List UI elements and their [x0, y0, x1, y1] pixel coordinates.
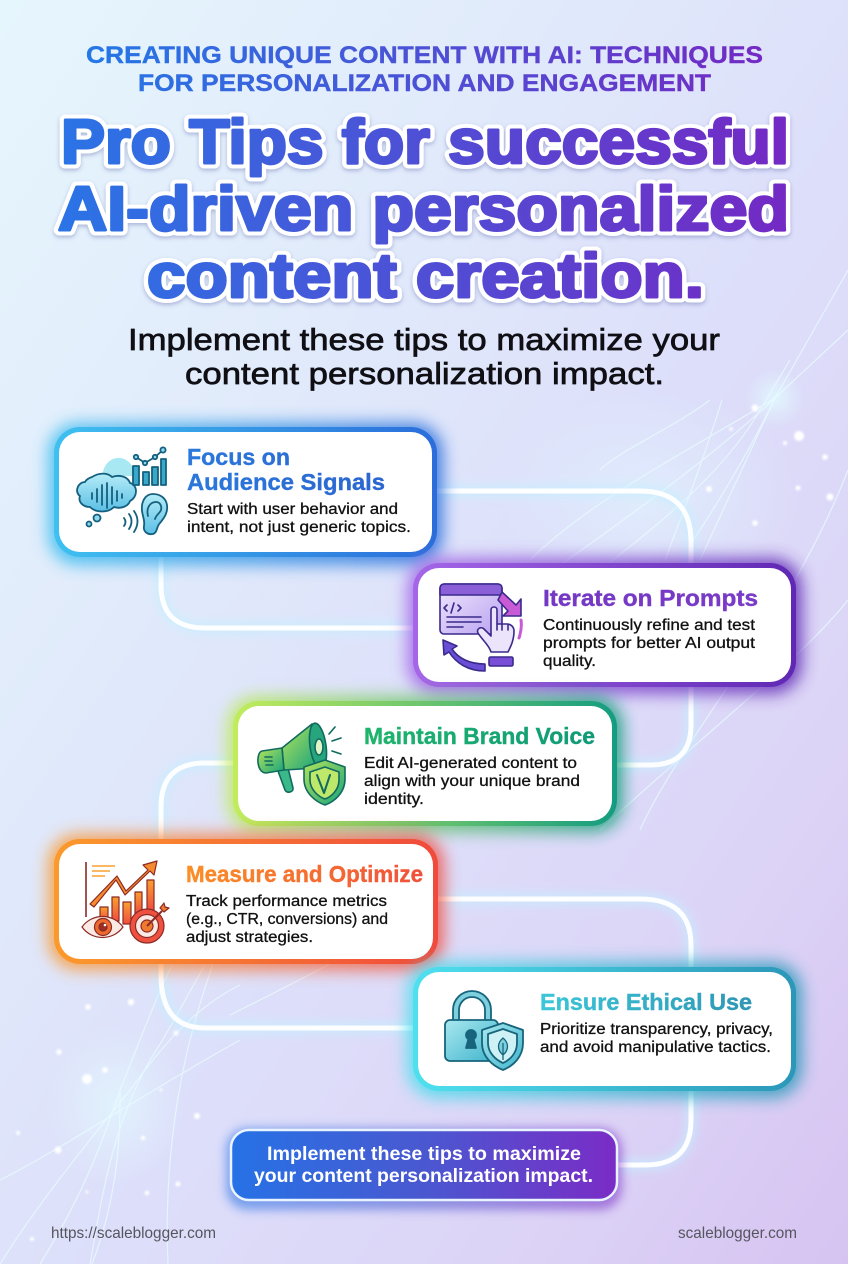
connectors: [161, 491, 691, 1165]
footer left url: https://scaleblogger.com: [51, 1225, 216, 1242]
main title: [58, 107, 789, 311]
icon: cloud, chart and ear: [77, 447, 167, 534]
call to action: Implement these tips to maximize: [267, 1144, 581, 1165]
description: Continuously refine and test: [543, 617, 756, 634]
heading: Measure and Optimize: [186, 861, 423, 887]
main title: Pro Tips for successful: [61, 107, 789, 177]
icon: padlock and shield: [445, 991, 523, 1070]
main title: Pro Tips for successful: [61, 107, 789, 177]
heading: Audience Signals: [187, 469, 385, 495]
description: Prioritize transparency, privacy,: [540, 1021, 773, 1038]
description: Start with user behavior and: [187, 501, 398, 518]
main title: AI-driven personalized: [58, 174, 789, 244]
description: [543, 617, 756, 670]
heading: Ensure Ethical Use: [540, 989, 752, 1015]
description: identity.: [364, 791, 424, 808]
description: [364, 755, 580, 808]
description: [186, 893, 388, 946]
main title: AI-driven personalized: [58, 174, 789, 244]
description: [187, 501, 411, 536]
eyebrow heading: [86, 42, 763, 97]
call to action: [226, 1128, 622, 1210]
eyebrow heading: CREATING UNIQUE CONTENT WITH AI: TECHNIQUES: [86, 42, 763, 69]
heading: Focus on: [187, 444, 290, 470]
panel: measure and optimize: [48, 834, 444, 970]
description: adjust strategies.: [186, 929, 313, 946]
icon: code window and hand: [440, 584, 521, 671]
panel: iterate on prompts: [407, 558, 802, 694]
subtitle: Implement these tips to maximize your: [128, 322, 720, 357]
description: and avoid manipulative tactics.: [540, 1039, 771, 1056]
description: prompts for better AI output: [543, 635, 756, 652]
panel: ensure ethical use: [407, 962, 802, 1098]
heading: [187, 444, 385, 495]
description: (e.g., CTR, conversions) and: [186, 911, 388, 928]
panel: focus on audience signals: [48, 423, 443, 565]
description: intent, not just generic topics.: [187, 519, 411, 536]
panel: maintain brand voice: [227, 696, 623, 832]
eyebrow heading: FOR PERSONALIZATION AND ENGAGEMENT: [138, 70, 711, 97]
description: align with your unique brand: [364, 773, 580, 790]
icon: growth chart, eye and target: [82, 861, 169, 943]
call to action: your content personalization impact.: [254, 1166, 593, 1187]
main title: content creation.: [147, 241, 704, 311]
description: quality.: [543, 653, 596, 670]
description: Track performance metrics: [186, 893, 387, 910]
description: [540, 1021, 773, 1056]
footer right url: scaleblogger.com: [678, 1225, 797, 1242]
subtitle: [128, 322, 720, 391]
main title: content creation.: [147, 241, 704, 311]
description: Edit AI-generated content to: [364, 755, 577, 772]
heading: Iterate on Prompts: [543, 585, 758, 611]
heading: Maintain Brand Voice: [364, 723, 595, 749]
icon: megaphone and shield: [258, 722, 345, 805]
subtitle: content personalization impact.: [185, 356, 664, 391]
